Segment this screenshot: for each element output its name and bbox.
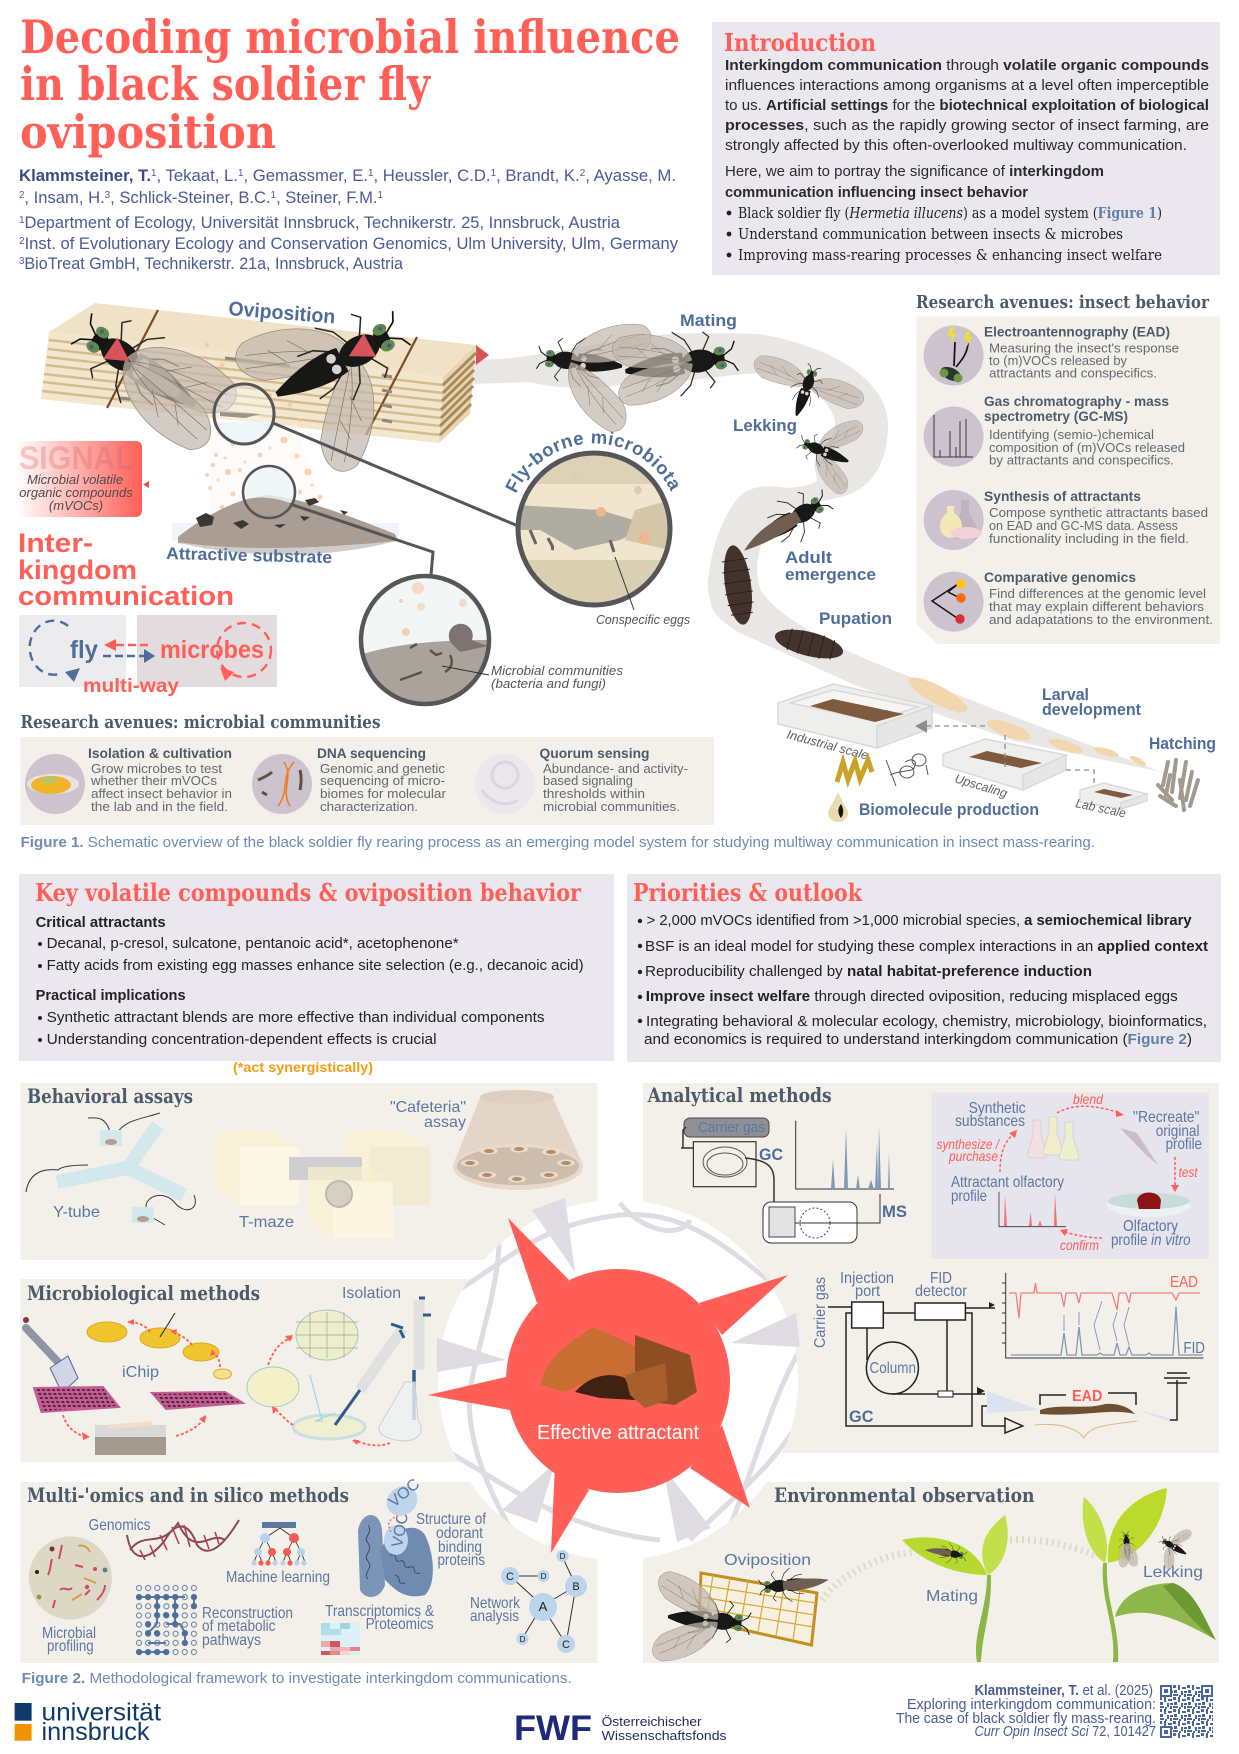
panel: key volatile compounds: Key volatile compounds & oviposition behavior <box>35 878 581 907</box>
icon: lab crate <box>1080 783 1147 809</box>
heading: analytical methods: Analytical methods <box>647 1084 832 1107</box>
panel: insect behavior methods: Find differences at the genomic level <box>989 587 1206 601</box>
hatching eggs <box>1158 760 1198 810</box>
transcriptomics heatmap: Transcriptomics & <box>325 1603 434 1620</box>
panel: introduction: Improving mass-rearing processes & enhancing insect welfare <box>738 248 1162 264</box>
odorant binding protein: Structure of <box>416 1511 486 1528</box>
panel: olfactory profile recreation <box>932 1091 1209 1259</box>
biomolecule icons <box>828 754 928 822</box>
logo: FWF: Österreichischer <box>602 1714 702 1729</box>
EAD insect antenna: EAD <box>1072 1388 1102 1405</box>
heading: inter-kingdom communication: Inter- <box>18 528 93 558</box>
microbial profiling: profiling <box>47 1638 94 1655</box>
odorant binding protein: proteins <box>438 1552 485 1569</box>
machine learning tree <box>226 1522 330 1586</box>
panel: priorities and outlook: and economics is required to understand interkingdom communication ( Figure 2) <box>644 1032 1192 1048</box>
panel: insect behavior methods: Comparative genomics <box>984 570 1136 585</box>
environmental scene: Lekking <box>1143 1564 1203 1581</box>
panel: microbial methods: sequencing of micro- <box>320 774 445 788</box>
network analysis: Network <box>470 1595 521 1612</box>
panel: olfactory profile recreation: substances <box>955 1113 1025 1130</box>
isolation workflow <box>247 1285 431 1445</box>
rearing crates <box>778 684 1147 809</box>
authors: Klammsteiner, T.1, Tekaat, L.1, Gemassmer, E.1, Heussler, C.D.1, Brandt, K.2, Ayasse, M. <box>19 166 676 185</box>
icon: enzyme outline <box>886 754 928 786</box>
panel: key volatile compounds: Critical attractants <box>36 915 166 931</box>
research avenues: microbial communities: Research avenues: microbial communities <box>20 712 380 733</box>
panel: key volatile compounds: Synthetic attractant blends are more effective than individual components <box>47 1010 545 1026</box>
icon: lekking fly 2 <box>785 400 878 502</box>
cafeteria assay: "Cafeteria" <box>390 1099 466 1116</box>
logo: FWF: Wissenschaftsfonds <box>602 1728 727 1743</box>
panel: microbial methods: whether their mVOCs <box>90 774 217 788</box>
attractive substrate mound <box>172 495 399 555</box>
environmental scene: Mating <box>926 1588 978 1605</box>
GC-EAD schematic: FID <box>930 1270 952 1287</box>
panel: priorities and outlook: > 2,000 mVOCs identified from >1,000 microbial species, a semiochemical library <box>647 913 1192 929</box>
label: oviposition: Oviposition <box>228 298 336 328</box>
flies ovipositing on wood <box>57 268 454 505</box>
GC-EAD schematic <box>812 1270 1205 1438</box>
icon: cultivation dish <box>25 754 85 814</box>
icon: pupa vertical <box>719 543 757 627</box>
icon: oil drop <box>828 792 848 822</box>
GC-EAD schematic: Injection <box>840 1270 894 1287</box>
panel: olfactory profile recreation: purchase <box>948 1148 998 1164</box>
stage labels: emergence <box>785 565 876 584</box>
figure 2 caption: Figure 2. Methodological framework to investigate interkingdom communications. <box>22 1670 572 1687</box>
label: attractive substrate: Attractive substrate <box>166 544 332 567</box>
panel: microbial methods: Isolation & cultivation <box>88 746 232 761</box>
icon: multichannel pipette <box>23 1317 79 1399</box>
panel: microbial methods: Grow microbes to test <box>91 762 223 776</box>
signal box: organic compounds <box>19 485 133 500</box>
citation: Exploring interkingdom communication: <box>907 1697 1156 1713</box>
panel: introduction: Interkingdom communication through volatile organic compounds <box>725 57 1209 74</box>
authors: 2, Insam, H.3, Schlick-Steiner, B.C.1, Steiner, F.M.1 <box>19 188 383 207</box>
panel: introduction: strongly affected by this often-overlooked multiway communication. <box>725 137 1187 154</box>
scale labels: Lab scale <box>1074 796 1127 821</box>
panel: microbial methods <box>20 737 714 825</box>
panel: priorities and outlook: Integrating behavioral & molecular ecology, chemistry, microbiology, bioinformatics, <box>646 1014 1207 1030</box>
panel: olfactory profile recreation: synthesize / <box>937 1136 1001 1152</box>
microbial profiling: Microbial <box>42 1625 96 1642</box>
network analysis: D <box>541 1572 547 1581</box>
metabolic pathways grid: Reconstruction <box>202 1605 293 1622</box>
icon: egg net with flies <box>646 1565 830 1673</box>
genomics DNA <box>88 1517 239 1560</box>
panel: olfactory profile recreation: confirm <box>1060 1237 1099 1253</box>
environmental scene: Oviposition <box>724 1552 811 1569</box>
multi-way diagram: multi-way <box>83 676 179 697</box>
panel: introduction: Black soldier fly (Hermetia illucens) as a model system (Figure 1) <box>738 205 1162 222</box>
panel: olfactory profile recreation: original <box>1156 1123 1200 1140</box>
panel: insect behavior methods: Electroantennography (EAD) <box>984 324 1170 340</box>
central white circle with web <box>437 1198 800 1560</box>
scale labels: Industrial scale <box>785 727 870 763</box>
multi-way diagram: fly <box>70 636 98 664</box>
panel: introduction: processes , such as the rapidly growing sector of insect farming, are <box>725 117 1209 134</box>
citation: The case of black soldier fly mass-rearing. <box>896 1711 1156 1727</box>
GC-MS schematic <box>681 1118 907 1243</box>
icon: vial <box>1120 1128 1158 1165</box>
panel: microbial methods: Quorum sensing <box>540 746 650 761</box>
GC-MS schematic: Carrier gas <box>698 1119 765 1136</box>
icon: lekking fly 1 <box>741 346 870 436</box>
logo: universität innsbruck <box>15 1699 161 1746</box>
citation: Klammsteiner, T. et al. (2025) <box>974 1683 1153 1699</box>
mating pair <box>530 310 742 442</box>
EAD-FID chart: FID <box>1183 1340 1205 1357</box>
panel: olfactory profile recreation: profile <box>1166 1136 1202 1153</box>
panel: olfactory profile recreation: profile in vitro <box>1111 1232 1191 1249</box>
effective attractant star: Effective attractant <box>537 1422 699 1444</box>
label: microbial communities: Microbial communities <box>491 664 623 678</box>
magnified circle: fly-borne microbiota <box>516 452 672 610</box>
icon: GC-MS circle <box>924 406 984 466</box>
icon: plant 2 <box>1083 1488 1216 1662</box>
odorant binding protein: VOC <box>389 1512 412 1549</box>
panel: insect behavior methods: Identifying (semio-)chemical <box>989 428 1154 442</box>
stage labels: Pupation <box>819 609 892 628</box>
label: microbial communities <box>442 664 623 691</box>
life cycle band <box>474 333 1161 772</box>
panel: microbial methods: affect insect behavior in <box>91 787 232 801</box>
panel: insect behavior methods <box>916 316 1220 644</box>
panel: olfactory profile recreation: "Recreate" <box>1133 1109 1200 1126</box>
heading: environmental observation: Environmental observation <box>774 1484 1034 1507</box>
icon: DNA circle <box>252 754 312 814</box>
panel: introduction: to us. Artificial settings for the biotechnical exploitation of biological <box>725 97 1209 114</box>
stage labels: Hatching <box>1149 734 1216 753</box>
dashed scale arrows <box>926 726 1094 783</box>
heading: inter-kingdom communication <box>18 528 234 611</box>
lens on substrate <box>243 466 295 520</box>
stage labels: Lekking <box>733 416 797 435</box>
panel: microbial methods: the lab and in the field. <box>91 800 228 814</box>
larvae <box>905 672 1147 768</box>
label: microbial communities: (bacteria and fungi) <box>491 677 606 691</box>
GC-MS schematic: GC <box>759 1145 783 1164</box>
lens on wood <box>214 384 274 446</box>
panel: priorities and outlook: Priorities & outlook <box>633 878 863 907</box>
cafeteria assay <box>390 1090 583 1190</box>
figure 1 caption: Figure 1. Schematic overview of the black soldier fly rearing process as an emerging model system for studying multiway communication in insect mass-rearing. <box>20 834 1095 851</box>
GC-EAD schematic: Column <box>870 1360 916 1377</box>
panel: introduction <box>712 22 1220 275</box>
signal dots rising from substrate <box>205 343 322 530</box>
panel: introduction: Understand communication between insects & microbes <box>738 227 1123 243</box>
icon: petri with substrate <box>1107 1192 1191 1217</box>
icon: industrial crate <box>778 684 932 748</box>
panel: insect behavior methods: that may explain different behaviors <box>989 600 1204 614</box>
affiliations <box>19 214 679 273</box>
citation <box>896 1683 1156 1740</box>
wood block <box>41 303 489 443</box>
panel: introduction: influences interactions among organisms at a level often imperceptible <box>725 77 1209 94</box>
EAD-FID chart: EAD <box>1170 1274 1198 1291</box>
isolation workflow: Isolation <box>342 1285 401 1302</box>
panel: insect behavior methods: and adapatations to the environment. <box>989 613 1213 627</box>
GC-EAD schematic: detector <box>915 1283 968 1300</box>
network analysis: C <box>506 1571 514 1583</box>
icon: flasks <box>1027 1117 1079 1160</box>
iChip workflow <box>23 1313 243 1455</box>
panel: insect behavior methods: Compose synthetic attractants based <box>989 506 1208 520</box>
icon: emerging adult fly <box>731 479 839 569</box>
network analysis: C <box>562 1639 570 1651</box>
scale labels: Upscaling <box>953 771 1009 801</box>
panel: insect behavior methods: by attractants and conspecifics. <box>989 454 1174 468</box>
GC-EAD schematic: GC <box>849 1407 874 1426</box>
GC-EAD schematic: Carrier gas <box>812 1277 829 1348</box>
panel: priorities and outlook <box>627 874 1221 1062</box>
microbial profiling <box>29 1536 112 1655</box>
panel: key volatile compounds: Practical implications <box>36 988 186 1004</box>
heading: microbiological methods: Microbiological methods <box>27 1282 260 1305</box>
odorant binding protein: binding <box>438 1539 482 1556</box>
odorant binding protein: VOC <box>386 1476 423 1511</box>
title: oviposition <box>20 105 276 159</box>
title: Decoding microbial influence <box>20 10 680 64</box>
cafeteria assay: assay <box>424 1114 466 1131</box>
QR code <box>1160 1685 1213 1738</box>
network analysis: D <box>560 1552 566 1561</box>
icon: attractant rock <box>541 1327 697 1408</box>
panel: insect behavior methods: on EAD and GC-MS data. Assess <box>989 519 1178 533</box>
method panel backgrounds <box>20 1083 1219 1663</box>
panel: insect behavior methods: to (m)VOCs released by <box>989 354 1128 368</box>
network analysis: analysis <box>470 1608 519 1625</box>
panel: microbial methods: based signaling <box>543 774 633 788</box>
panel: olfactory profile recreation: Attractant olfactory <box>951 1174 1064 1191</box>
panel: olfactory profile recreation: blend <box>1073 1091 1104 1107</box>
panel: priorities and outlook: Reproducibility challenged by natal habitat-preference induction <box>645 964 1092 980</box>
network analysis: B <box>572 1581 580 1593</box>
heading: inter-kingdom communication: kingdom <box>18 555 137 585</box>
signal box: (mVOCs) <box>49 498 103 513</box>
panel: insect behavior methods: Synthesis of attractants <box>984 489 1141 504</box>
lekking flies <box>731 346 878 569</box>
panel: insect behavior methods: Gas chromatography - mass <box>984 394 1169 409</box>
note: act synergistically: (*act synergistically) <box>233 1059 373 1075</box>
stage labels: development <box>1042 700 1141 719</box>
panel: introduction: Here, we aim to portray the significance of interkingdom <box>725 163 1104 180</box>
metabolic pathways grid <box>134 1584 293 1656</box>
icon: plant 1 <box>902 1515 1008 1662</box>
icon: culture discs <box>87 1322 232 1379</box>
affiliations: 3BioTreat GmbH, Technikerstr. 21a, Innsbruck, Austria <box>19 255 404 273</box>
panel: key volatile compounds: Decanal, p-cresol, sulcatone, pentanoic acid*, acetophenone* <box>47 936 459 952</box>
odorant binding protein <box>358 1476 486 1597</box>
panel: insect behavior methods: composition of (m)VOCs released <box>989 441 1185 455</box>
icon: fly B <box>608 318 742 410</box>
pupae <box>719 543 846 664</box>
odorant binding protein: odorant <box>436 1525 483 1542</box>
panel: olfactory profile recreation: Olfactory <box>1123 1218 1178 1235</box>
logo: universität innsbruck: innsbruck <box>42 1718 150 1746</box>
icon: synthesis circle <box>924 490 984 550</box>
scale labels <box>785 727 1127 821</box>
GC-MS schematic: MS <box>882 1202 907 1221</box>
title: in black soldier fly <box>20 57 431 111</box>
signal box: Microbial volatile <box>27 472 123 487</box>
heading: behavioral assays: Behavioral assays <box>27 1085 193 1108</box>
label: fly-borne microbiota: Fly-borne microbiota <box>505 432 678 493</box>
label: conspecific eggs: Conspecific eggs <box>596 613 690 627</box>
signal box: SIGNAL <box>19 440 134 476</box>
panel: priorities and outlook: Improve insect welfare through directed oviposition, reducing misplaced eggs <box>646 989 1178 1005</box>
EAD-FID chart <box>1002 1273 1205 1358</box>
icon: EAD circle <box>924 326 984 386</box>
affiliations: 2Inst. of Evolutionary Ecology and Conservation Genomics, Ulm University, Ulm, Germany <box>19 235 679 253</box>
icon: fly A <box>530 310 657 442</box>
panel: microbial methods: characterization. <box>320 800 418 814</box>
EAD insect antenna <box>987 1388 1170 1438</box>
icon: small flies <box>923 1518 1198 1575</box>
icon: pupa horizontal <box>772 624 846 664</box>
network analysis: D <box>520 1635 526 1644</box>
logo: FWF: FWF <box>514 1709 592 1748</box>
Y-tube: Y-tube <box>53 1204 100 1221</box>
panel: microbial methods: microbial communities. <box>543 800 680 814</box>
icon: chitin coil <box>837 760 872 782</box>
metabolic pathways grid: of metabolic <box>202 1618 276 1635</box>
panel: microbial methods: Abundance- and activity- <box>543 762 688 776</box>
icon: soil box <box>95 1421 166 1455</box>
metabolic pathways grid: pathways <box>202 1632 261 1649</box>
logo: FWF <box>514 1709 727 1748</box>
panel: insect behavior methods: Measuring the insect's response <box>989 342 1179 356</box>
panel: olfactory profile recreation: profile <box>951 1188 987 1205</box>
panel: insect behavior methods: spectrometry (GC-MS) <box>984 409 1128 424</box>
icon: fly right <box>220 268 454 505</box>
panel: olfactory profile recreation: test <box>1179 1164 1199 1180</box>
heading: inter-kingdom communication: communication <box>18 581 234 611</box>
icon: genomics tree circle <box>924 572 984 632</box>
panel: microbial methods: thresholds within <box>543 787 645 801</box>
panel: olfactory profile recreation: Synthetic <box>969 1100 1026 1117</box>
affiliations: 1Department of Ecology, Universität Innsbruck, Technikerstr. 25, Innsbruck, Austria <box>19 214 621 232</box>
network analysis: A <box>539 1599 548 1614</box>
transcriptomics heatmap: Proteomics <box>366 1616 434 1633</box>
icon: plates <box>34 1387 119 1412</box>
multi-way diagram <box>19 615 277 697</box>
stage labels: Biomolecule production <box>859 800 1039 819</box>
GC-EAD schematic: port <box>855 1283 880 1300</box>
genomics DNA: Genomics <box>88 1517 150 1534</box>
panel: insect behavior methods: attractants and conspecifics. <box>989 367 1157 381</box>
signal box <box>16 440 149 517</box>
panel: microbial methods: Genomic and genetic <box>320 762 445 776</box>
environmental scene <box>646 1488 1216 1673</box>
stage labels: Mating <box>680 311 737 330</box>
T-maze <box>215 1132 430 1239</box>
authors <box>19 166 676 207</box>
dotted flight trail <box>822 1540 1095 1600</box>
network analysis <box>470 1550 587 1653</box>
icon: fly left <box>57 292 246 460</box>
panel: introduction: communication influencing insect behavior <box>725 184 1028 201</box>
icon: upscaling crate <box>943 739 1066 790</box>
logo: universität innsbruck: universität <box>42 1699 161 1727</box>
Y-tube <box>26 1113 195 1225</box>
citation: Curr Opin Insect Sci 72, 101427 <box>974 1724 1156 1740</box>
panel: key volatile compounds: Fatty acids from existing egg masses enhance site selection (e.g., decanoic acid) <box>47 958 584 974</box>
machine learning tree: Machine learning <box>226 1569 330 1586</box>
title <box>20 10 680 159</box>
stage labels <box>680 311 1216 819</box>
multi-way diagram: microbes <box>160 636 264 664</box>
panel: key volatile compounds <box>19 874 614 1061</box>
iChip workflow: iChip <box>122 1364 159 1381</box>
panel: insect behavior methods: functionality including in the field. <box>989 532 1189 546</box>
T-maze: T-maze <box>239 1214 294 1231</box>
heading: multi-omics: Multi-'omics and in silico methods <box>27 1484 349 1507</box>
connector lines <box>273 423 518 575</box>
panel: microbial methods: DNA sequencing <box>317 746 426 761</box>
panel: microbial methods: biomes for molecular <box>320 787 446 801</box>
transcriptomics heatmap <box>321 1603 434 1655</box>
panel: priorities and outlook: BSF is an ideal model for studying these complex interactions in an applied context <box>645 939 1208 955</box>
panel: key volatile compounds: Understanding concentration-dependent effects is crucial <box>47 1032 437 1048</box>
effective attractant star <box>428 1218 788 1553</box>
stage labels: Larval <box>1042 685 1089 704</box>
stage labels: Adult <box>785 548 832 567</box>
panel: introduction: Introduction <box>724 28 876 57</box>
magnified circle: microbial communities <box>360 575 490 705</box>
icon: quorum sensing circle <box>475 754 535 814</box>
